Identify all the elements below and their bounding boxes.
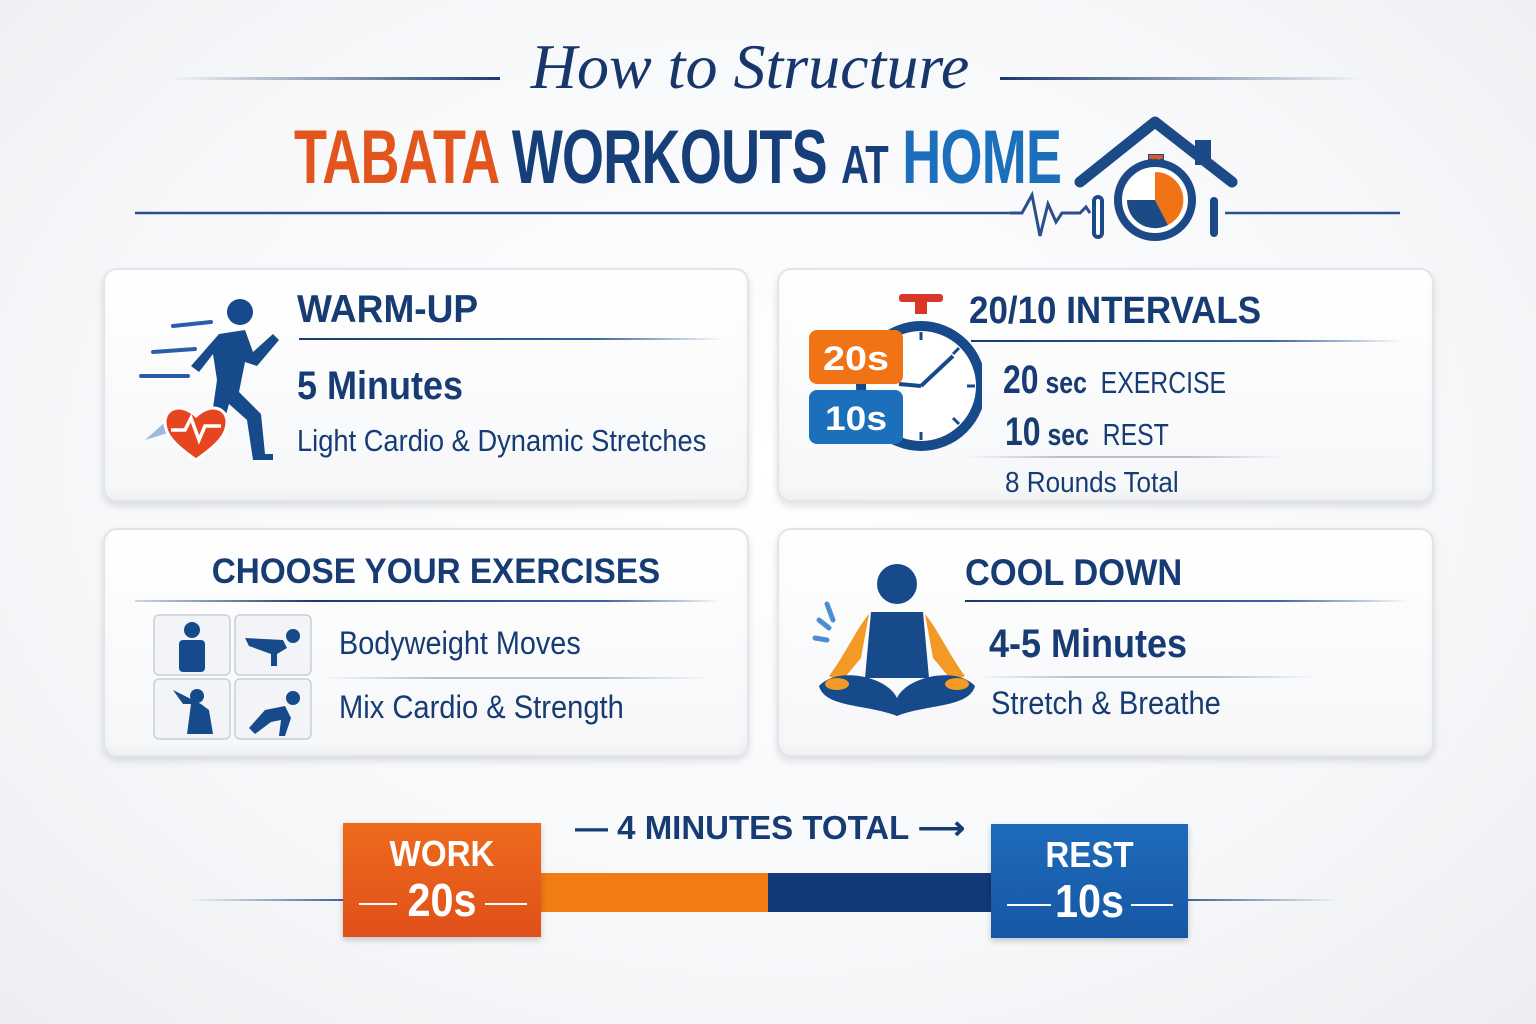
title line 1 — [182, 31, 1352, 102]
text: 5 minutes: 5 Minutes — [297, 364, 463, 408]
header icon: house with stopwatch and heartbeat line — [135, 116, 1400, 241]
box: rest 10s — [991, 824, 1188, 938]
text: 20 sec exercise: 20 sec EXERCISE — [1003, 358, 1226, 402]
text: bodyweight moves: Bodyweight Moves — [339, 625, 581, 661]
box: work 20s: WORK — [390, 833, 494, 874]
text: 8 rounds: 8 Rounds Total — [1005, 467, 1179, 499]
panel: choose your exercises — [103, 528, 749, 757]
text: light cardio: Light Cardio & Dynamic Stretches — [297, 423, 706, 458]
heading: intervals: 20/10 INTERVALS — [969, 290, 1261, 332]
title line 1: How to Structure — [531, 31, 969, 102]
heading: warm-up: WARM-UP — [297, 288, 478, 331]
timeline bar: work/rest — [197, 809, 1333, 944]
icon: runner with heart — [139, 299, 279, 460]
heading: choose: CHOOSE YOUR EXERCISES — [212, 552, 660, 591]
panel: cool down — [777, 528, 1434, 757]
box: rest 10s: REST — [1045, 834, 1134, 875]
icon: stopwatch with 20s/10s: 10s — [825, 400, 887, 438]
box: work 20s: 20s — [407, 874, 477, 926]
icon grid: exercises — [153, 614, 312, 740]
text: mix cardio: Mix Cardio & Strength — [339, 689, 624, 725]
icon: meditating person — [812, 564, 975, 716]
icon: stopwatch with 20s/10s: 20s — [823, 340, 889, 378]
text: 10 sec rest: 10 sec REST — [1005, 410, 1169, 454]
heading: cool down: COOL DOWN — [965, 552, 1182, 593]
box: rest 10s: 10s — [1055, 875, 1124, 927]
icon: stopwatch with 20s/10s — [809, 294, 982, 451]
panel: 20/10 intervals — [777, 268, 1434, 502]
text: stretch & breathe: Stretch & Breathe — [991, 685, 1221, 721]
text: 4-5 minutes: 4-5 Minutes — [989, 622, 1187, 666]
box: work 20s — [343, 823, 541, 937]
label: 4 minutes total: — 4 MINUTES TOTAL ⟶ — [575, 809, 965, 846]
title line 2: TABATA WORKOUTS AT HOME — [294, 115, 1061, 200]
panel: warm-up — [103, 268, 749, 502]
